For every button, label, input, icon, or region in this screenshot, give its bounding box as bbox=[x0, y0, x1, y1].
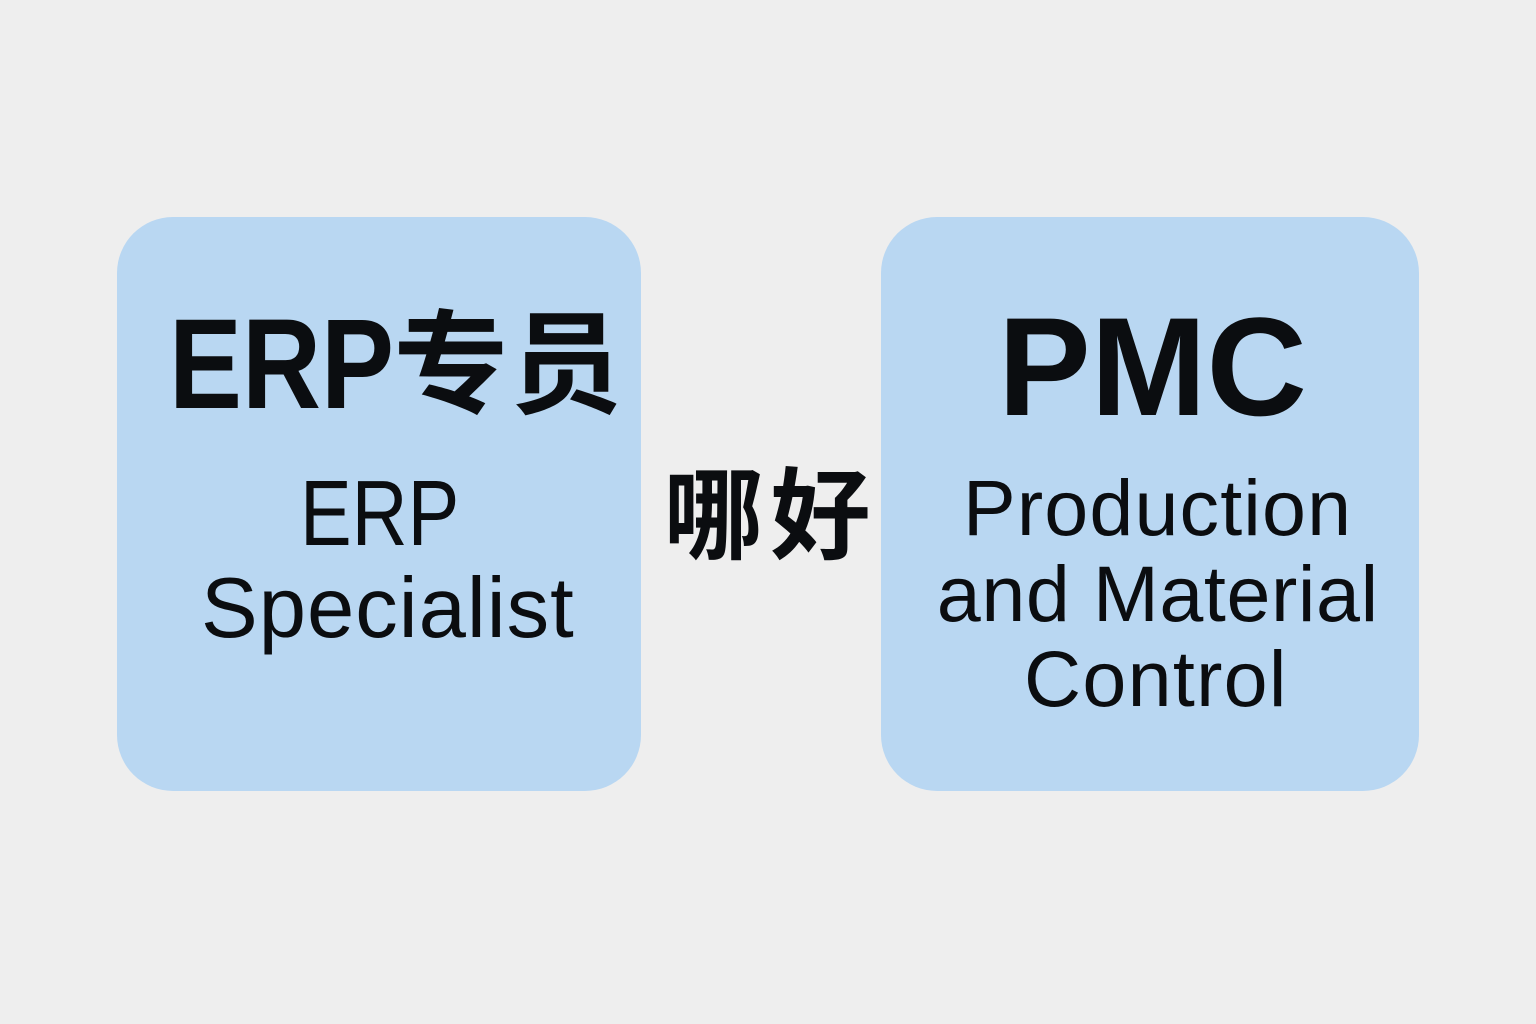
heading: 哪好: 哪 bbox=[664, 461, 764, 573]
heading: 哪好 bbox=[664, 461, 870, 573]
heading: ERP专员 bbox=[169, 293, 622, 436]
panel: ERP specialist bbox=[117, 217, 641, 791]
text: ERP Specialist: Specialist bbox=[201, 561, 575, 656]
text: Production and Material Control: Control bbox=[1024, 634, 1288, 723]
text: Production and Material Control bbox=[937, 463, 1379, 723]
panel: PMC bbox=[881, 217, 1419, 791]
text: ERP Specialist: ERP bbox=[300, 461, 459, 565]
heading: ERP专员: 员 bbox=[510, 303, 622, 428]
heading: ERP专员: 专 bbox=[393, 303, 508, 428]
text: ERP Specialist bbox=[201, 461, 575, 656]
heading: 哪好: 好 bbox=[770, 461, 870, 573]
heading: ERP专员: ERP bbox=[169, 293, 394, 436]
text: Production and Material Control: and Material bbox=[937, 549, 1379, 638]
heading: PMC: PMC bbox=[998, 288, 1307, 445]
text: Production and Material Control: Production bbox=[963, 463, 1352, 552]
